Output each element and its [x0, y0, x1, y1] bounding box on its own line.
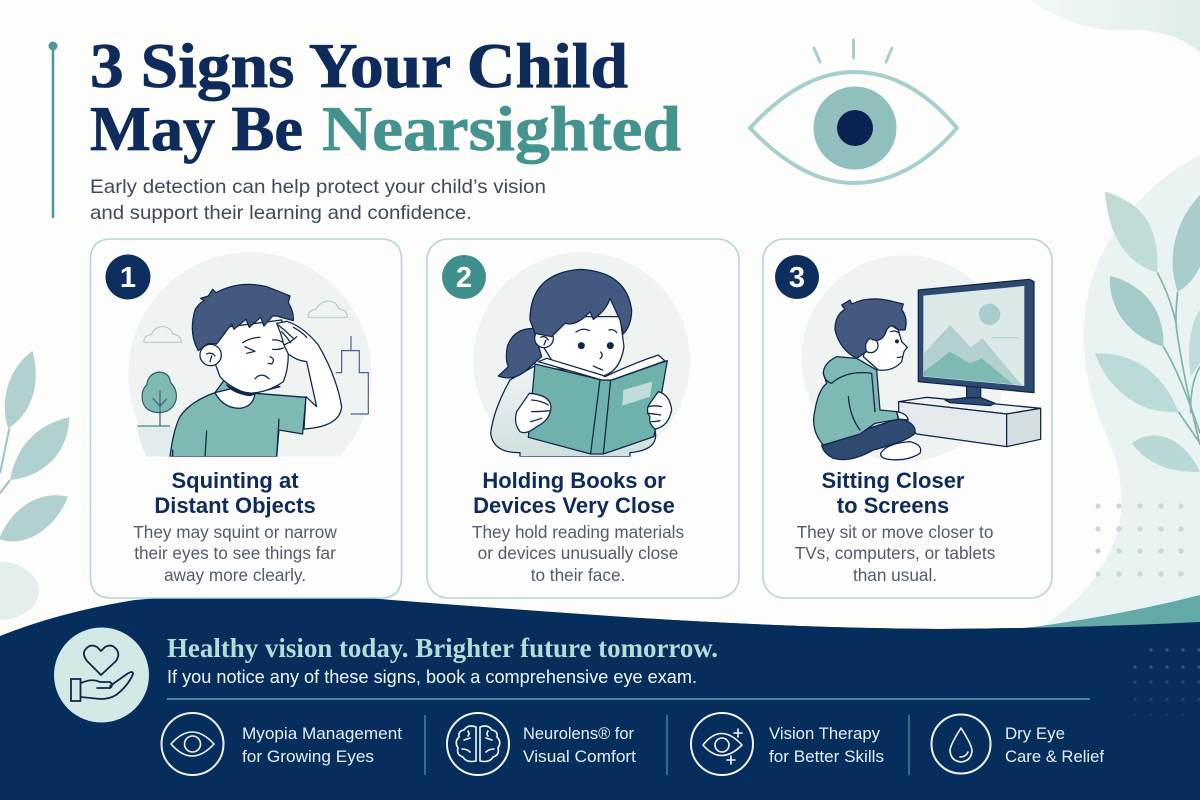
- title: May Be: [90, 93, 303, 164]
- background blob: lower left: [0, 562, 39, 620]
- illustration: girl reading: [473, 252, 690, 469]
- service: neurolens: [447, 713, 636, 775]
- card 2 description: They hold reading materials: [472, 522, 684, 542]
- dot grid: footer: [1133, 648, 1200, 717]
- card 1 description: They may squint or narrow: [133, 522, 337, 542]
- label: dry eye: Care & Relief: [1005, 747, 1104, 766]
- badge 1: 1: [120, 262, 136, 294]
- illustration: boy watching TV: [802, 255, 1041, 462]
- service: myopia management: [162, 713, 402, 775]
- panel: sign 2 holding books: [427, 239, 739, 598]
- card outline 1: [90, 239, 402, 598]
- title: 3 Signs Your Child: [90, 30, 628, 101]
- panel: sign 3 sitting close: [763, 239, 1052, 598]
- icon: eye with rays: [750, 40, 957, 183]
- accent bar beside title: [48, 42, 58, 218]
- subtitle: Early detection can help protect your child’s vision: [90, 176, 546, 198]
- background blob: top right: [1030, 0, 1200, 52]
- label: neurolens: [523, 724, 636, 766]
- dividers between services: [425, 715, 909, 775]
- badge 2: [442, 255, 486, 299]
- subtitle: and support their learning and confidence.: [90, 202, 472, 224]
- footer rule: [167, 698, 1090, 700]
- card 3 heading: [821, 468, 965, 518]
- card 1 heading: Squinting at: [171, 468, 299, 493]
- label: myopia: Myopia Management: [242, 724, 402, 743]
- card 3 description: than usual.: [853, 565, 937, 585]
- icon: brain: [447, 713, 509, 775]
- badge 1: [106, 254, 150, 300]
- badge 2: 2: [456, 262, 472, 294]
- background blob: right side: [1040, 155, 1200, 628]
- subtitle: [90, 176, 546, 224]
- card 2 heading: Holding Books or: [482, 468, 666, 493]
- label: neurolens: Visual Comfort: [523, 747, 636, 766]
- title: Nearsighted: [322, 93, 681, 164]
- service: vision therapy: [691, 713, 884, 775]
- panel: sign 1 squinting: [90, 239, 402, 598]
- card 2 heading: [473, 468, 675, 518]
- card 3 heading: Sitting Closer: [821, 468, 965, 493]
- dot grid: right: [1095, 503, 1184, 577]
- footer wave band: [0, 594, 1200, 800]
- card 2 description: [472, 522, 684, 585]
- teal wedge above footer: [1010, 595, 1200, 640]
- card 3 description: They sit or move closer to: [797, 522, 993, 542]
- plant: right leaves: [1095, 192, 1200, 472]
- footer subtext: If you notice any of these signs, book a comprehensive eye exam.: [167, 666, 697, 687]
- card 1 heading: Distant Objects: [154, 493, 316, 518]
- label: neurolens: Neurolens® for: [523, 724, 634, 743]
- card outline 3: [763, 239, 1052, 598]
- footer lower band: [640, 618, 1200, 660]
- label: myopia: for Growing Eyes: [242, 747, 374, 766]
- icon: eye with plus signs: [691, 713, 753, 775]
- label: vision therapy: [769, 724, 884, 766]
- icon: heart in hand: [54, 628, 149, 722]
- card 3 heading: to Screens: [837, 493, 949, 518]
- card 2 heading: Devices Very Close: [473, 493, 675, 518]
- label: dry eye: [1005, 724, 1104, 766]
- icon: eye: [162, 713, 224, 775]
- label: vision therapy: for Better Skills: [769, 747, 884, 766]
- icon: water drop: [932, 714, 990, 774]
- plant: left leaves: [0, 351, 69, 541]
- card 2 description: or devices unusually close: [478, 543, 678, 563]
- footer heading: Healthy vision today. Brighter future tomorrow.: [167, 633, 718, 663]
- label: vision therapy: Vision Therapy: [769, 724, 880, 743]
- card 1 description: [133, 522, 337, 585]
- label: myopia: [242, 724, 402, 766]
- badge 3: 3: [789, 262, 805, 294]
- badge 3: [775, 255, 819, 299]
- card 2 description: to their face.: [531, 565, 625, 585]
- card 1 heading: [154, 468, 316, 518]
- card outline 2: [427, 239, 739, 598]
- label: dry eye: Dry Eye: [1005, 724, 1065, 743]
- card 1 description: their eyes to see things far: [134, 543, 336, 563]
- illustration: boy squinting: [128, 252, 372, 457]
- service: dry eye: [932, 714, 1104, 774]
- card 3 description: [795, 522, 995, 585]
- card 3 description: TVs, computers, or tablets: [795, 543, 995, 563]
- title: [90, 30, 681, 164]
- card 1 description: away more clearly.: [164, 565, 306, 585]
